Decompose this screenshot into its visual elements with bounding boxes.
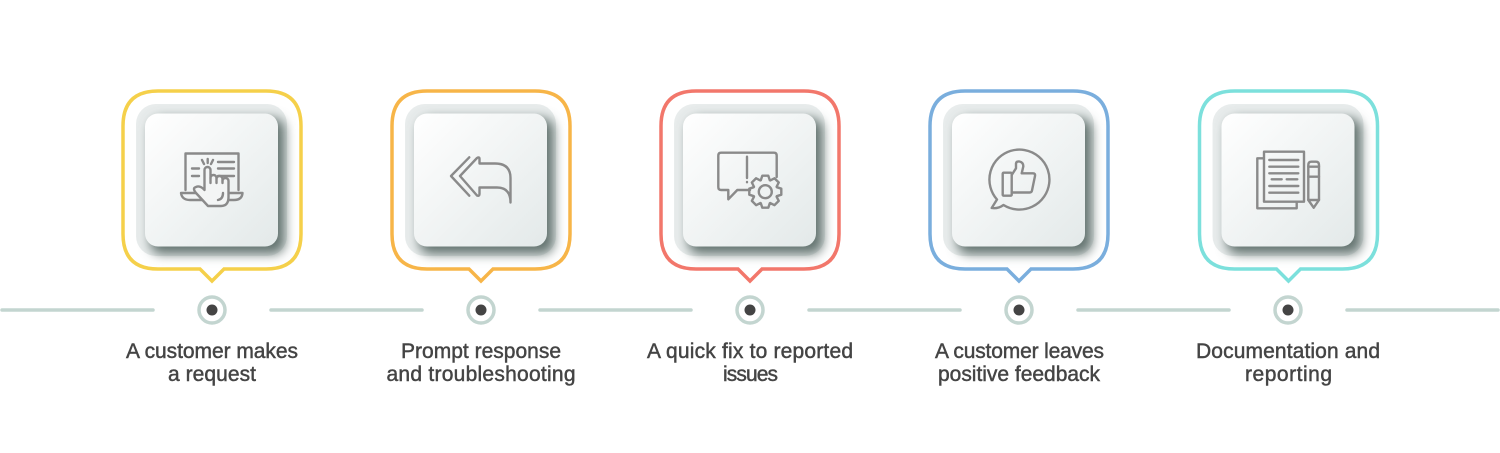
timeline marker [1275,297,1301,323]
timeline marker [737,297,763,323]
icon: alert message with gear [718,153,781,208]
step 4: a customer leaves positive feedback [930,91,1108,386]
speech bubble outline: red [661,91,839,281]
timeline marker [468,297,494,323]
step 5: documentation and reporting [1196,91,1380,386]
card [1222,114,1354,246]
inner plate [405,104,556,256]
label: issues [723,363,778,386]
icon: reply-all arrow [451,157,510,202]
card shadow [150,118,285,254]
label: Prompt response [401,340,561,363]
label [126,340,298,386]
label: A quick fix to reported [647,340,853,363]
card [145,114,278,246]
icon: thumbs up in speech bubble [989,150,1049,210]
label: a request [168,363,256,386]
speech bubble outline: blue [930,91,1108,281]
timeline line [2,308,1498,312]
card shadow [688,118,823,254]
card shadow [419,118,554,254]
timeline marker [199,297,225,323]
speech bubble outline: orange [392,91,570,281]
label: A customer makes [126,340,298,363]
card [952,114,1085,246]
icon: hand tapping a laptop [181,154,242,206]
label [935,340,1104,386]
step 2: prompt response and troubleshooting [386,91,576,386]
label [647,340,853,386]
inner plate [674,104,825,256]
speech bubble outline: yellow [123,91,301,281]
label: positive feedback [938,363,1100,386]
step 1: a customer makes a request [123,91,301,386]
timeline marker [1006,297,1032,323]
label: and troubleshooting [386,363,576,386]
card [414,114,547,246]
card shadow [1226,118,1362,254]
step 3: a quick fix to reported issues [647,91,853,386]
inner plate [1212,104,1364,256]
speech bubble outline: teal [1200,91,1378,281]
card shadow [957,118,1092,254]
label: A customer leaves [935,340,1104,363]
label: reporting [1245,363,1332,386]
inner plate [943,104,1094,256]
inner plate [136,104,287,256]
card [683,114,816,246]
label: Documentation and [1196,340,1380,363]
icon: documents and pencil [1257,152,1319,208]
label [386,340,576,386]
label [1196,340,1380,386]
